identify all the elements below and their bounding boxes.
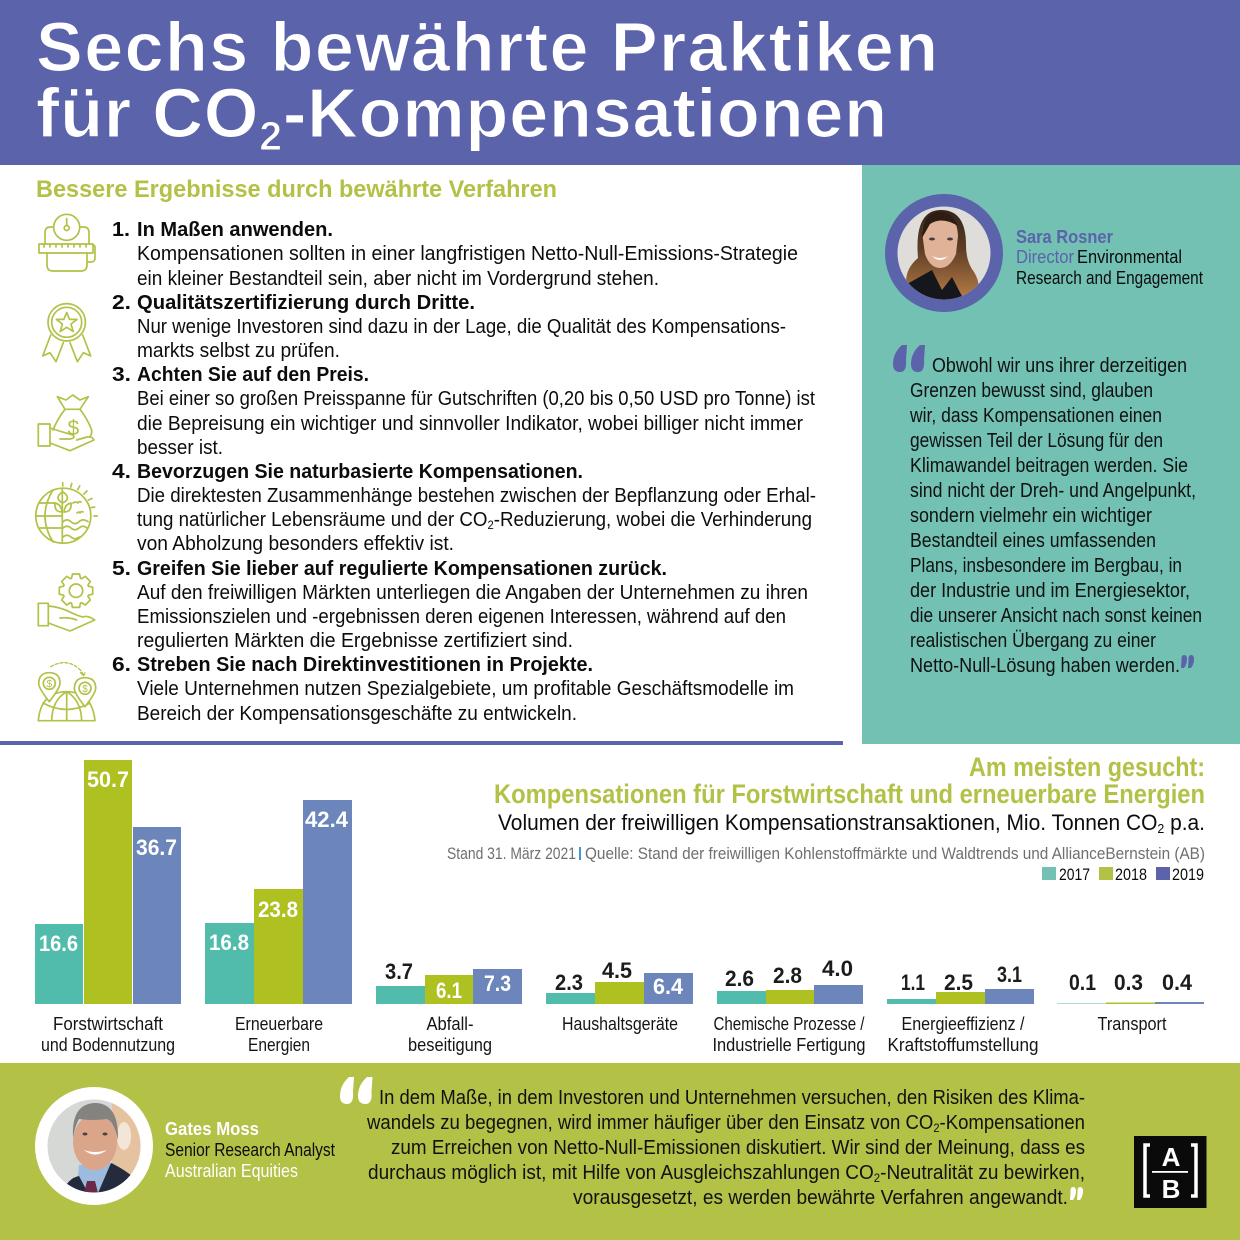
name and role: Sara Rosner: Director: [1016, 247, 1074, 267]
icon: scale and tape: [39, 214, 95, 271]
name and role: Gates Moss: Senior Research Analyst: [165, 1140, 335, 1160]
icon: closing quote mark: [1181, 655, 1194, 668]
bar group: Energieeffizienz / Kraftstoffumstellung: 3.1: [997, 962, 1022, 987]
quote text: Sara Rosner: Klimawandel beitragen werden. Sie: [910, 455, 1188, 477]
icon: globe with two dollar pins: $: [82, 684, 88, 695]
chart heading: Am meisten gesucht:: [969, 752, 1205, 782]
bar group: Chemische Prozesse / Industrielle Fertigung: 2.8: [773, 963, 802, 988]
quote text: Gates Moss: In dem Maße, in dem Investoren und Unternehmen versuchen, den Risiken des Klima-: [379, 1087, 1085, 1109]
bar group: Energieeffizienz / Kraftstoffumstellung: Energieeffizienz /: [902, 1013, 1025, 1034]
bar chart: [35, 760, 1204, 1055]
bar group: Transport: 0.4: [1162, 970, 1193, 995]
title banner: [0, 0, 1240, 165]
bar group: Transport: 0.3: [1114, 970, 1143, 995]
practice 5: regulated offsets: 5.: [112, 558, 131, 580]
quote text: Sara Rosner: die unserer Ansicht nach sonst keinen: [910, 605, 1202, 627]
practice 4: nature-based offsets: von Abholzung besonders effektiv ist.: [137, 533, 454, 555]
practice 3: price: Bei einer so großen Preisspanne für Gutschriften (0,20 bis 0,50 USD pro Tonne) ist: [137, 388, 815, 410]
practice 4: nature-based offsets: Die direktesten Zusammenhänge bestehen zwischen der Bepflanzung oder Erhal-: [137, 485, 816, 507]
logo: AB: B: [1162, 1174, 1180, 1204]
bar group: Haushaltsgeräte: 4.5: [602, 958, 632, 983]
practice 6: direct investment: [112, 654, 794, 725]
portrait: Gates Moss: [35, 1087, 153, 1205]
practice 6: direct investment: 6.: [112, 654, 131, 676]
icon: money bag in hand: [38, 395, 94, 451]
heading: best practices: Bessere Ergebnisse durch bewährte Verfahren: [36, 176, 557, 203]
quote text: Gates Moss: vorausgesetzt, es werden bewährte Verfahren angewandt.: [573, 1187, 1068, 1209]
bar group: Abfallbeseitigung: 7.3: [484, 971, 511, 996]
practice 1: moderation: Kompensationen sollten in einer langfristigen Netto-Null-Emissions-Strategie: [137, 243, 798, 265]
practice 1: moderation: [112, 219, 798, 290]
practice 2: third-party certification: Qualitätszertifizierung durch Dritte.: [137, 292, 475, 314]
panel: best practices list: [36, 176, 816, 725]
practice 3: price: besser ist.: [137, 437, 223, 459]
chart legend: [1042, 865, 1204, 884]
practice 1: moderation: In Maßen anwenden.: [137, 219, 333, 241]
quote text: Sara Rosner: gewissen Teil der Lösung für den: [910, 430, 1163, 452]
quote text: Sara Rosner: Bestandteil eines umfassenden: [910, 530, 1156, 552]
icon: opening quote mark: [340, 1077, 372, 1104]
bar group: Erneuerbare Energien: 16.8: [209, 930, 249, 955]
quote text: Sara Rosner: Netto-Null-Lösung haben werden.: [910, 655, 1180, 677]
bar group: Erneuerbare Energien: 42.4: [305, 807, 349, 832]
bar group: Forstwirtschaft und Bodennutzung: und Bodennutzung: [41, 1034, 175, 1055]
bar group: Erneuerbare Energien: Erneuerbare: [235, 1013, 323, 1034]
quote text: Sara Rosner: Plans, insbesondere im Bergbau, in: [910, 555, 1182, 577]
practice 4: nature-based offsets: [112, 461, 816, 555]
title banner: 2: [259, 113, 282, 159]
icon: globe with two dollar pins: [38, 663, 96, 721]
chart heading: Volumen der freiwilligen Kompensationstransaktionen, Mio. Tonnen CO: [498, 810, 1191, 835]
name and role: Sara Rosner: Research and Engagement: [1016, 268, 1203, 288]
name and role: Sara Rosner: Sara Rosner: [1016, 227, 1113, 247]
practice 3: price: [112, 364, 815, 459]
quote text: Gates Moss: zum Erreichen von Netto-Null-Emissionen diskutiert. Wir sind der Meinung, dass es: [391, 1137, 1085, 1159]
title banner: Sechs bewährte Praktiken: [36, 8, 938, 86]
practice 4: nature-based offsets: -Reduzierung, wobei die Verhinderung: [494, 509, 812, 531]
name and role: Sara Rosner: [1016, 227, 1203, 288]
name and role: Gates Moss: Gates Moss: [165, 1119, 259, 1139]
practice 2: third-party certification: [112, 292, 786, 362]
practice 4: nature-based offsets: tung natürlicher Lebensräume und der CO: [137, 509, 512, 531]
icon: opening quote mark: [893, 345, 925, 372]
bar group: Haushaltsgeräte: 6.4: [653, 974, 684, 999]
quote text: Sara Rosner: Grenzen bewusst sind, glauben: [910, 380, 1153, 402]
bar group: Transport: 0.1: [1069, 970, 1096, 995]
practice 4: nature-based offsets: 4.: [112, 461, 131, 483]
bar group: Energieeffizienz / Kraftstoffumstellung: 2.5: [944, 970, 973, 995]
bar group: Erneuerbare Energien: Energien: [248, 1034, 310, 1055]
bar group: Energieeffizienz / Kraftstoffumstellung: [887, 962, 1038, 1055]
quote text: Gates Moss: 2: [933, 1121, 940, 1135]
practice 2: third-party certification: 2.: [112, 292, 131, 314]
chart heading: [494, 752, 1205, 836]
icon: money bag in hand: $: [67, 417, 79, 440]
practice 3: price: die Bepreisung ein wichtiger und sinnvoller Indikator, wobei billiger nicht immer: [137, 413, 803, 435]
name and role: Gates Moss: Australian Equities: [165, 1161, 298, 1181]
icon: gear over hand: [38, 574, 95, 631]
bar group: Chemische Prozesse / Industrielle Fertigung: Chemische Prozesse /: [714, 1013, 865, 1034]
bar group: Transport: [1057, 970, 1204, 1034]
panel: Sara Rosner quote: [862, 165, 1240, 744]
bar group: Haushaltsgeräte: [546, 958, 693, 1034]
icon: globe with plant and waves: [36, 483, 97, 543]
bar group: Abfallbeseitigung: 3.7: [385, 959, 413, 984]
bar group: Forstwirtschaft und Bodennutzung: 16.6: [39, 931, 78, 956]
quote text: Gates Moss: [366, 1087, 1085, 1209]
bar group: Chemische Prozesse / Industrielle Fertigung: 4.0: [822, 956, 853, 981]
bar group: Energieeffizienz / Kraftstoffumstellung: Kraftstoffumstellung: [888, 1034, 1038, 1055]
practice 4: nature-based offsets: Bevorzugen Sie naturbasierte Kompensationen.: [137, 461, 583, 483]
practice 5: regulated offsets: Emissionszielen und -ergebnissen deren eigenen Interessen, während auf den: [137, 606, 786, 628]
bar group: Transport: Transport: [1098, 1013, 1166, 1034]
practice 5: regulated offsets: regulierten Märkten die Ergebnisse zertifiziert sind.: [137, 630, 573, 652]
quote text: Sara Rosner: sind nicht der Dreh- und Angelpunkt,: [910, 480, 1196, 502]
quote text: Sara Rosner: realistischen Übergang zu einer: [910, 630, 1156, 652]
quote text: Sara Rosner: sondern vielmehr ein wichtiger: [910, 505, 1152, 527]
bar group: Forstwirtschaft und Bodennutzung: Forstwirtschaft: [53, 1013, 163, 1034]
title banner: für CO: [36, 74, 258, 152]
bar group: Forstwirtschaft und Bodennutzung: 36.7: [136, 835, 177, 860]
bar group: Chemische Prozesse / Industrielle Fertigung: Industrielle Fertigung: [712, 1034, 866, 1055]
bar group: Haushaltsgeräte: Haushaltsgeräte: [562, 1013, 678, 1034]
bar group: Erneuerbare Energien: [205, 800, 352, 1055]
quote text: Gates Moss: -Kompensationen: [940, 1112, 1085, 1134]
title banner: -Kompensationen: [283, 74, 887, 152]
practice 6: direct investment: Viele Unternehmen nutzen Spezialgebiete, um profitable Geschäftsmodelle im: [137, 678, 794, 700]
chart legend: 2019: [1172, 865, 1204, 884]
chart heading: p.a.: [1164, 810, 1205, 835]
practice 2: third-party certification: Nur wenige Investoren sind dazu in der Lage, die Qualität des Kompensations-: [137, 316, 786, 338]
quote text: Gates Moss: wandels zu begegnen, wird immer häufiger über den Einsatz von CO: [367, 1112, 977, 1134]
practice 6: direct investment: Bereich der Kompensationsgeschäfte zu entwickeln.: [137, 703, 577, 725]
bar group: Forstwirtschaft und Bodennutzung: 50.7: [87, 767, 129, 792]
chart source note: Stand 31. März 2021: [447, 845, 576, 863]
quote text: Gates Moss: -Neutralität zu bewirken,: [880, 1162, 1085, 1184]
practice 6: direct investment: Streben Sie nach Direktinvestitionen in Projekte.: [137, 654, 593, 676]
chart legend: 2018: [1115, 865, 1147, 884]
practice 3: price: Achten Sie auf den Preis.: [137, 364, 369, 386]
bar group: Abfallbeseitigung: Abfall-: [426, 1013, 474, 1034]
practice 1: moderation: 1.: [112, 219, 130, 241]
bar group: Forstwirtschaft und Bodennutzung: [35, 760, 181, 1055]
bar group: Abfallbeseitigung: 6.1: [436, 978, 462, 1003]
logo: AB: [1134, 1136, 1206, 1208]
bar group: Energieeffizienz / Kraftstoffumstellung: 1.1: [901, 970, 925, 995]
quote text: Gates Moss: 2: [874, 1171, 880, 1185]
icon: closing quote mark: [1070, 1187, 1083, 1200]
bar group: Haushaltsgeräte: 2.3: [555, 970, 583, 995]
portrait: Sara Rosner: [885, 194, 1003, 312]
quote text: Sara Rosner: der Industrie und im Energiesektor,: [910, 580, 1190, 602]
bar group: Abfallbeseitigung: [376, 959, 522, 1055]
practice 5: regulated offsets: Greifen Sie lieber auf regulierte Kompensationen zurück.: [137, 558, 667, 580]
practice 2: third-party certification: markts selbst zu prüfen.: [137, 340, 340, 362]
quote text: Sara Rosner: [909, 355, 1202, 677]
quote text: Sara Rosner: wir, dass Kompensationen einen: [909, 405, 1162, 427]
name and role: Gates Moss: [165, 1119, 335, 1181]
bar group: Chemische Prozesse / Industrielle Fertigung: 2.6: [725, 966, 754, 991]
practice 4: nature-based offsets: 2: [487, 518, 494, 532]
bar group: Chemische Prozesse / Industrielle Fertigung: [712, 956, 866, 1055]
quote text: Sara Rosner: Obwohl wir uns ihrer derzeitigen: [932, 355, 1187, 377]
bar group: Abfallbeseitigung: beseitigung: [408, 1034, 492, 1055]
quote text: Gates Moss: durchaus möglich ist, mit Hilfe von Ausgleichszahlungen CO: [368, 1162, 900, 1184]
practice 5: regulated offsets: Auf den freiwilligen Märkten unterliegen die Angaben der Unternehmen zu ihren: [137, 582, 808, 604]
name and role: Sara Rosner: Environmental: [1077, 247, 1182, 267]
chart legend: 2017: [1059, 865, 1090, 884]
practice 5: regulated offsets: [112, 558, 808, 652]
icon: globe with two dollar pins: $: [47, 679, 53, 690]
practice 1: moderation: ein kleiner Bestandteil sein, aber nicht im Vordergrund stehen.: [137, 268, 659, 290]
chart source note: Quelle: Stand der freiwilligen Kohlenstoffmärkte und Waldtrends und AllianceBernstein (AB): [585, 845, 1205, 863]
practice 3: price: 3.: [112, 364, 131, 386]
bar group: Erneuerbare Energien: 23.8: [258, 897, 298, 922]
icon: award rosette: [43, 304, 91, 362]
panel: Gates Moss quote: [0, 1063, 1240, 1240]
chart heading: 2: [1157, 821, 1164, 836]
logo: AB: A: [1162, 1142, 1181, 1172]
